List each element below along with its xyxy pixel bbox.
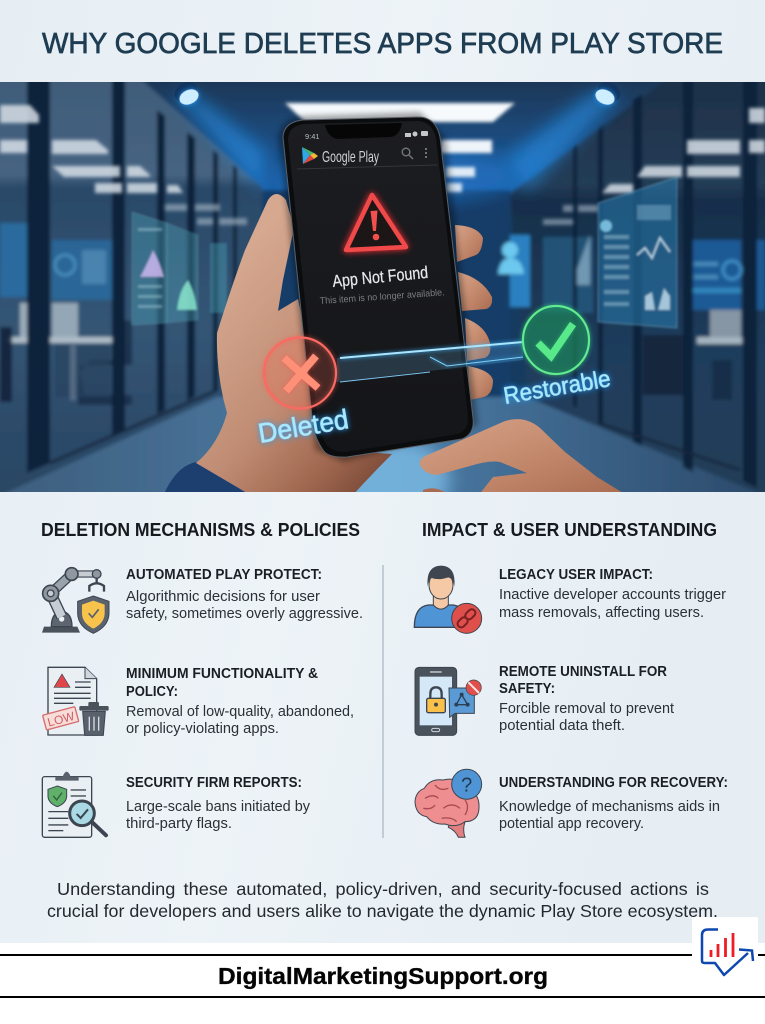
glass wall columns [27,72,757,488]
item description: mass removals, affecting users. [499,604,704,621]
holographic connector bar [337,341,523,382]
status time: 9:41 [305,132,320,141]
store name: Google Play [322,149,379,166]
item description: Removal of low-quality, abandoned, [126,703,354,720]
restorable label: Restorable [502,365,613,410]
item description: or policy-violating apps. [126,720,279,737]
heading: impact and user understanding: IMPACT & USER UNDERSTANDING [422,520,717,540]
item title: UNDERSTANDING FOR RECOVERY: [499,775,728,791]
closing statement: crucial for developers and users alike to navigate the dynamic Play Store ecosystem. [47,901,718,921]
item description: Forcible removal to prevent [499,700,675,717]
item description [126,703,354,737]
holding hand [196,194,493,496]
icon: user with broken link [414,566,482,633]
heading: deletion mechanisms: DELETION MECHANISMS & POLICIES [41,520,360,540]
app not found text: App Not Found [332,263,429,291]
item title: POLICY: [126,684,178,700]
item description: potential app recovery. [499,815,644,832]
item description: Algorithmic decisions for user [126,588,320,605]
logo: chat bubble with bars and arrow [692,917,758,975]
icon: clipboard with magnifier [42,772,106,837]
item title: LEGACY USER IMPACT: [499,567,653,583]
icon: document with low stamp and trash [43,667,109,735]
item title [499,664,667,697]
item title [126,666,319,700]
icon: phone with lock and blocked share [415,667,481,735]
sleeve [163,462,256,496]
closing statement [47,879,718,921]
deleted badge [264,338,336,408]
phone [278,112,478,462]
item description: Knowledge of mechanisms aids in [499,798,720,815]
icon: brain with question bubble [415,769,482,837]
item description: safety, sometimes overly aggressive. [126,605,363,622]
item description: Large-scale bans initiated by [126,798,310,815]
hero image: phone in server corridor [0,72,765,520]
holographic panels [132,177,677,328]
item description: potential data theft. [499,717,625,734]
blue spotlights [175,82,620,108]
item title: REMOTE UNINSTALL FOR [499,664,667,680]
icon: robot arm with shield [42,568,109,633]
footer website: DigitalMarketingSupport.org [218,963,548,989]
pointing hand [420,419,628,496]
unavailable text: This item is no longer available. [319,287,445,307]
item description [499,700,675,734]
icon: document with low stamp and trash: LOW [46,709,77,730]
item: remote uninstall for safety [415,664,675,735]
item: minimum functionality and policy [43,666,354,737]
notch [325,123,402,139]
item description [126,798,310,832]
closing statement: Understanding these automated, policy-driven, and security-focused actions is [57,879,709,899]
ceiling lights [0,103,765,225]
item description [499,798,720,832]
right wall detail [498,235,765,400]
title: WHY GOOGLE DELETES APPS FROM PLAY STORE [42,28,723,60]
item title: SECURITY FIRM REPORTS: [126,775,302,791]
footer band [0,943,765,1024]
restorable badge [523,306,589,374]
icon: warning triangle [346,195,406,250]
icon: menu dots [425,148,427,158]
item description: third-party flags. [126,815,232,832]
status icons [405,131,428,137]
item: understanding for recovery [415,769,728,837]
icon: search [402,148,413,159]
item: automated play protect [42,567,363,633]
item: security firm reports [42,772,310,837]
icon: brain with question bubble: ? [461,774,472,796]
item title: AUTOMATED PLAY PROTECT: [126,567,322,583]
item description [499,586,726,621]
left wall detail [0,223,132,405]
item description: Inactive developer accounts trigger [499,586,726,603]
item: legacy user impact [414,566,726,633]
item title: MINIMUM FUNCTIONALITY & [126,666,319,682]
deleted label: Deleted [256,403,351,449]
item title: SAFETY: [499,681,555,697]
item description [126,588,363,622]
corridor background [0,72,765,520]
icon: google play triangle [302,147,318,164]
